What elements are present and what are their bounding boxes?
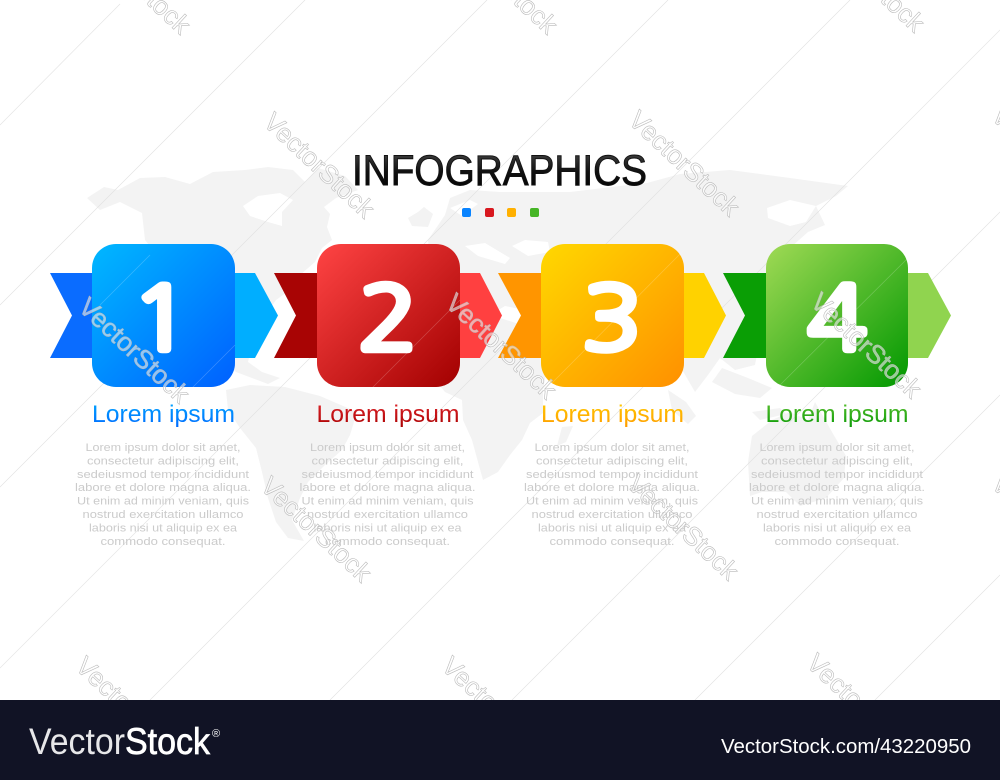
ribbon arrow 4 [900, 273, 951, 358]
heading 2: Lorem ipsum [316, 401, 460, 428]
footer url: VectorStock.com/43220950 [721, 735, 971, 758]
tile 4 [766, 244, 908, 387]
title: INFOGRAPHICS [352, 148, 647, 195]
body text 1: consectetur adipiscing elit, [87, 456, 239, 468]
body text 4: nostrud exercitation ullamco [756, 509, 918, 521]
body text 2: labore et dolore magna aliqua. [300, 482, 476, 494]
body text 1: labore et dolore magna aliqua. [75, 482, 251, 494]
watermarks: VectorStock [258, 106, 381, 225]
watermarks: VectorStock [73, 291, 196, 410]
step 3 [498, 244, 726, 548]
body text 4: Lorem ipsum dolor sit amet, [760, 442, 914, 454]
map inland water [243, 193, 816, 264]
body text 1: commodo consequat. [100, 536, 226, 548]
number 1: 1 [131, 276, 191, 363]
body text 1: Ut enim ad minim veniam, quis [77, 496, 249, 508]
footer bar [0, 700, 1000, 780]
registered mark: ® [212, 728, 220, 740]
watermarks: VectorStock [805, 286, 928, 405]
body text 1: Lorem ipsum dolor sit amet, [86, 442, 240, 454]
body text 1 [75, 442, 251, 548]
body text 2: nostrud exercitation ullamco [307, 509, 468, 521]
ribbon arrow 2 [450, 273, 502, 358]
ribbon tail 2 [274, 273, 325, 358]
tile 1 [92, 244, 235, 387]
ribbon tail 1 [50, 273, 100, 358]
tile 3 [541, 244, 684, 387]
watermarks: VectorStock [255, 470, 378, 589]
watermarks: VectorStock [801, 647, 924, 766]
body text 3: Lorem ipsum dolor sit amet, [534, 442, 690, 454]
body text 4: Ut enim ad minim veniam, quis [751, 496, 923, 508]
heading 3: Lorem ipsum [541, 401, 684, 428]
body text 2: consectetur adipiscing elit, [312, 456, 464, 468]
ribbon tail 3 [498, 273, 550, 358]
body text 3: commodo consequat. [550, 536, 674, 548]
step 1 [50, 244, 278, 548]
body text 4: labore et dolore magna aliqua. [749, 482, 925, 494]
watermarks: VectorStock [622, 468, 745, 587]
watermarks: VectorStock [623, 104, 746, 223]
heading 1: Lorem ipsum [92, 401, 235, 428]
body text 3: laboris nisi ut aliquip ex ea [538, 522, 687, 534]
body text 4: commodo consequat. [774, 536, 900, 548]
body text 2: Ut enim ad minim veniam, quis [302, 496, 474, 508]
body text 2 [300, 442, 476, 548]
heading 4: Lorem ipsum [766, 401, 908, 428]
number 3: 3 [582, 276, 642, 363]
body text 4: consectetur adipiscing elit, [761, 456, 913, 468]
tile 2 [317, 244, 460, 387]
body text 4: sedeiusmod tempor incididunt [751, 469, 924, 481]
body text 4: laboris nisi ut aliquip ex ea [763, 522, 912, 534]
watermarks: VectorStock [70, 650, 193, 769]
body text 3 [524, 442, 700, 548]
body text 2: sedeiusmod tempor incididunt [302, 469, 474, 481]
body text 1: nostrud exercitation ullamco [82, 509, 244, 521]
body text 3: Ut enim ad minim veniam, quis [526, 496, 698, 508]
number 4: 4 [807, 276, 867, 363]
body text 4 [749, 442, 925, 548]
faint lines over tiles [100, 250, 908, 390]
world map [87, 167, 848, 541]
body text 1: laboris nisi ut aliquip ex ea [89, 522, 238, 534]
body text 2: laboris nisi ut aliquip ex ea [314, 522, 462, 534]
body text 2: commodo consequat. [325, 536, 450, 548]
step 2 [274, 244, 502, 548]
body text 3: nostrud exercitation ullamco [532, 509, 692, 521]
body text 1: sedeiusmod tempor incididunt [77, 469, 250, 481]
ribbon tail 4 [723, 273, 775, 358]
colour dots [462, 208, 539, 217]
body text 3: consectetur adipiscing elit, [536, 456, 688, 468]
step 4 [723, 244, 951, 548]
footer logo word Stock: Stock [125, 721, 210, 762]
number 2: 2 [358, 276, 418, 363]
ribbon arrow 1 [225, 273, 278, 358]
body text 2: Lorem ipsum dolor sit amet, [310, 442, 465, 454]
body text 3: labore et dolore magna aliqua. [524, 482, 700, 494]
footer logo word Vector: Vector [29, 721, 125, 762]
body text 3: sedeiusmod tempor incididunt [526, 469, 699, 481]
watermarks: VectorStock [440, 287, 563, 406]
watermarks: VectorStock [436, 650, 559, 769]
ribbon arrow 3 [675, 273, 726, 358]
